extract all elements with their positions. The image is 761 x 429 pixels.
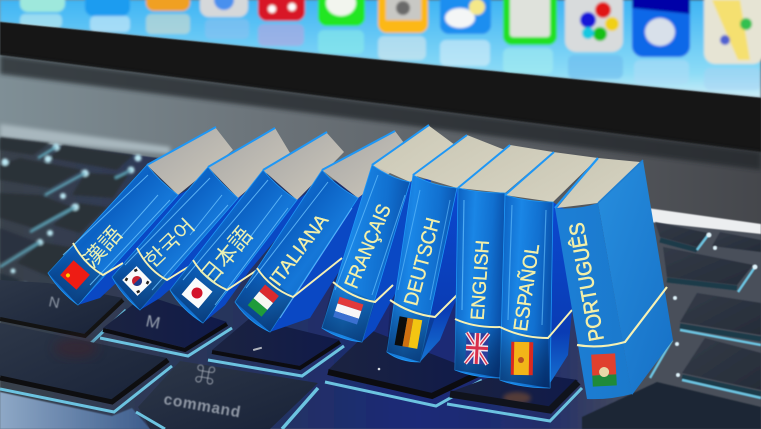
page edge	[505, 152, 554, 195]
spine shade	[112, 248, 167, 310]
pages	[322, 131, 413, 198]
spine	[112, 167, 238, 310]
spine shade	[235, 268, 293, 332]
pages	[557, 158, 640, 208]
band	[137, 248, 188, 280]
cover	[140, 178, 268, 310]
page edge	[147, 127, 216, 165]
keyboard well	[0, 138, 761, 429]
highlights	[398, 190, 450, 300]
flag: Japan	[182, 278, 212, 308]
spine shade	[455, 319, 502, 378]
pages	[505, 152, 598, 202]
highlights	[246, 182, 352, 318]
icon: messages app	[318, 0, 365, 26]
highlights	[462, 200, 464, 310]
spine shade	[170, 260, 227, 323]
book: English	[455, 145, 553, 378]
key: slash	[447, 370, 582, 421]
cover	[362, 178, 432, 342]
spine	[555, 203, 632, 399]
key: N	[0, 280, 126, 346]
spine	[235, 170, 358, 332]
title: ESPAÑOL	[508, 242, 544, 333]
laptop bezel	[0, 22, 761, 152]
flag: France	[333, 297, 363, 324]
icon: orange app	[146, 0, 190, 11]
book: Italian	[235, 131, 413, 332]
cover	[78, 176, 214, 305]
spine	[322, 165, 410, 342]
flag: Italy	[248, 284, 279, 317]
band	[257, 258, 342, 297]
key glows	[2, 144, 142, 288]
cover	[203, 180, 326, 323]
icon: contacts app	[378, 0, 428, 33]
back cover	[598, 160, 673, 395]
page edge	[322, 131, 395, 170]
highlights	[63, 175, 170, 285]
key mark: comma	[253, 347, 262, 351]
spine shade	[48, 243, 103, 305]
book: Spanish	[500, 152, 598, 388]
book: French	[322, 125, 455, 342]
icon: game app	[632, 0, 690, 57]
title: PORTUGUÊS	[565, 221, 609, 343]
command label: command	[162, 391, 242, 422]
spine	[387, 175, 457, 362]
pages	[147, 127, 233, 195]
key: comma	[208, 318, 344, 376]
icon: photos app	[565, 0, 623, 52]
title: ITALIANA	[266, 210, 333, 290]
book: Korean	[112, 128, 290, 310]
highlights	[125, 178, 228, 290]
highlights	[183, 180, 288, 305]
icon: maps app	[704, 0, 761, 64]
band	[500, 310, 572, 338]
page edge	[263, 132, 327, 170]
title: 漢語	[79, 223, 127, 272]
right side keys	[582, 222, 761, 429]
icon: mail app	[503, 0, 557, 45]
pages	[458, 145, 553, 193]
flag: Germany	[395, 316, 422, 349]
page edge	[413, 135, 467, 175]
pages	[263, 132, 344, 200]
pages	[413, 135, 505, 188]
icon: faded left tiles	[20, 0, 130, 16]
title: ENGLISH	[468, 240, 494, 321]
cover	[270, 180, 385, 332]
pages	[208, 128, 290, 198]
spacebar	[0, 323, 172, 412]
flag: UK	[465, 332, 489, 365]
key: period	[325, 330, 482, 406]
title: FRANÇAIS	[341, 201, 396, 292]
page edge	[458, 145, 510, 188]
spine	[500, 195, 553, 388]
spine shade	[500, 327, 550, 388]
flag: Spain	[511, 342, 533, 375]
page edge	[208, 128, 275, 167]
highlights	[508, 205, 546, 325]
key letter M: M	[144, 311, 162, 333]
bright silver strip, right side	[640, 207, 761, 234]
shadow band below bezel	[0, 55, 761, 170]
spine	[170, 170, 297, 323]
flag: Portugal	[591, 353, 617, 387]
title: 한국어	[140, 214, 199, 273]
laptop screen with app icons	[0, 0, 761, 98]
icon reflections	[20, 14, 761, 90]
key: M	[100, 295, 232, 356]
key letter N: N	[47, 293, 61, 312]
page edge	[372, 125, 429, 165]
title: DEUTSCH	[400, 215, 445, 308]
band	[455, 319, 500, 327]
book: Portuguese	[555, 158, 673, 399]
back cover edge	[598, 160, 643, 203]
book: German	[387, 135, 505, 362]
spine shade	[322, 282, 375, 342]
title: 日本語	[195, 222, 257, 289]
pages	[372, 125, 455, 182]
book: Chinese	[48, 127, 233, 305]
highlights	[335, 175, 405, 295]
flag: China	[60, 260, 90, 290]
book: Japanese	[170, 132, 344, 323]
icon: music app	[258, 0, 305, 21]
laptop palm rest	[0, 392, 150, 429]
icon: weather app	[440, 0, 491, 34]
band	[73, 243, 123, 275]
icon: grey app	[200, 0, 248, 17]
command symbol: ⌘	[193, 363, 217, 389]
page edge	[555, 158, 598, 208]
flag: South Korea	[122, 266, 152, 296]
spine	[48, 165, 178, 305]
command key	[136, 361, 318, 429]
band	[193, 260, 257, 290]
spine	[455, 188, 505, 378]
cover	[420, 188, 470, 362]
band	[390, 295, 457, 317]
reflection strip, left	[0, 124, 170, 154]
spine shade	[387, 300, 435, 362]
cover	[547, 202, 572, 388]
blurred upper-left keys	[0, 137, 142, 300]
band	[577, 287, 667, 346]
band	[333, 282, 393, 302]
